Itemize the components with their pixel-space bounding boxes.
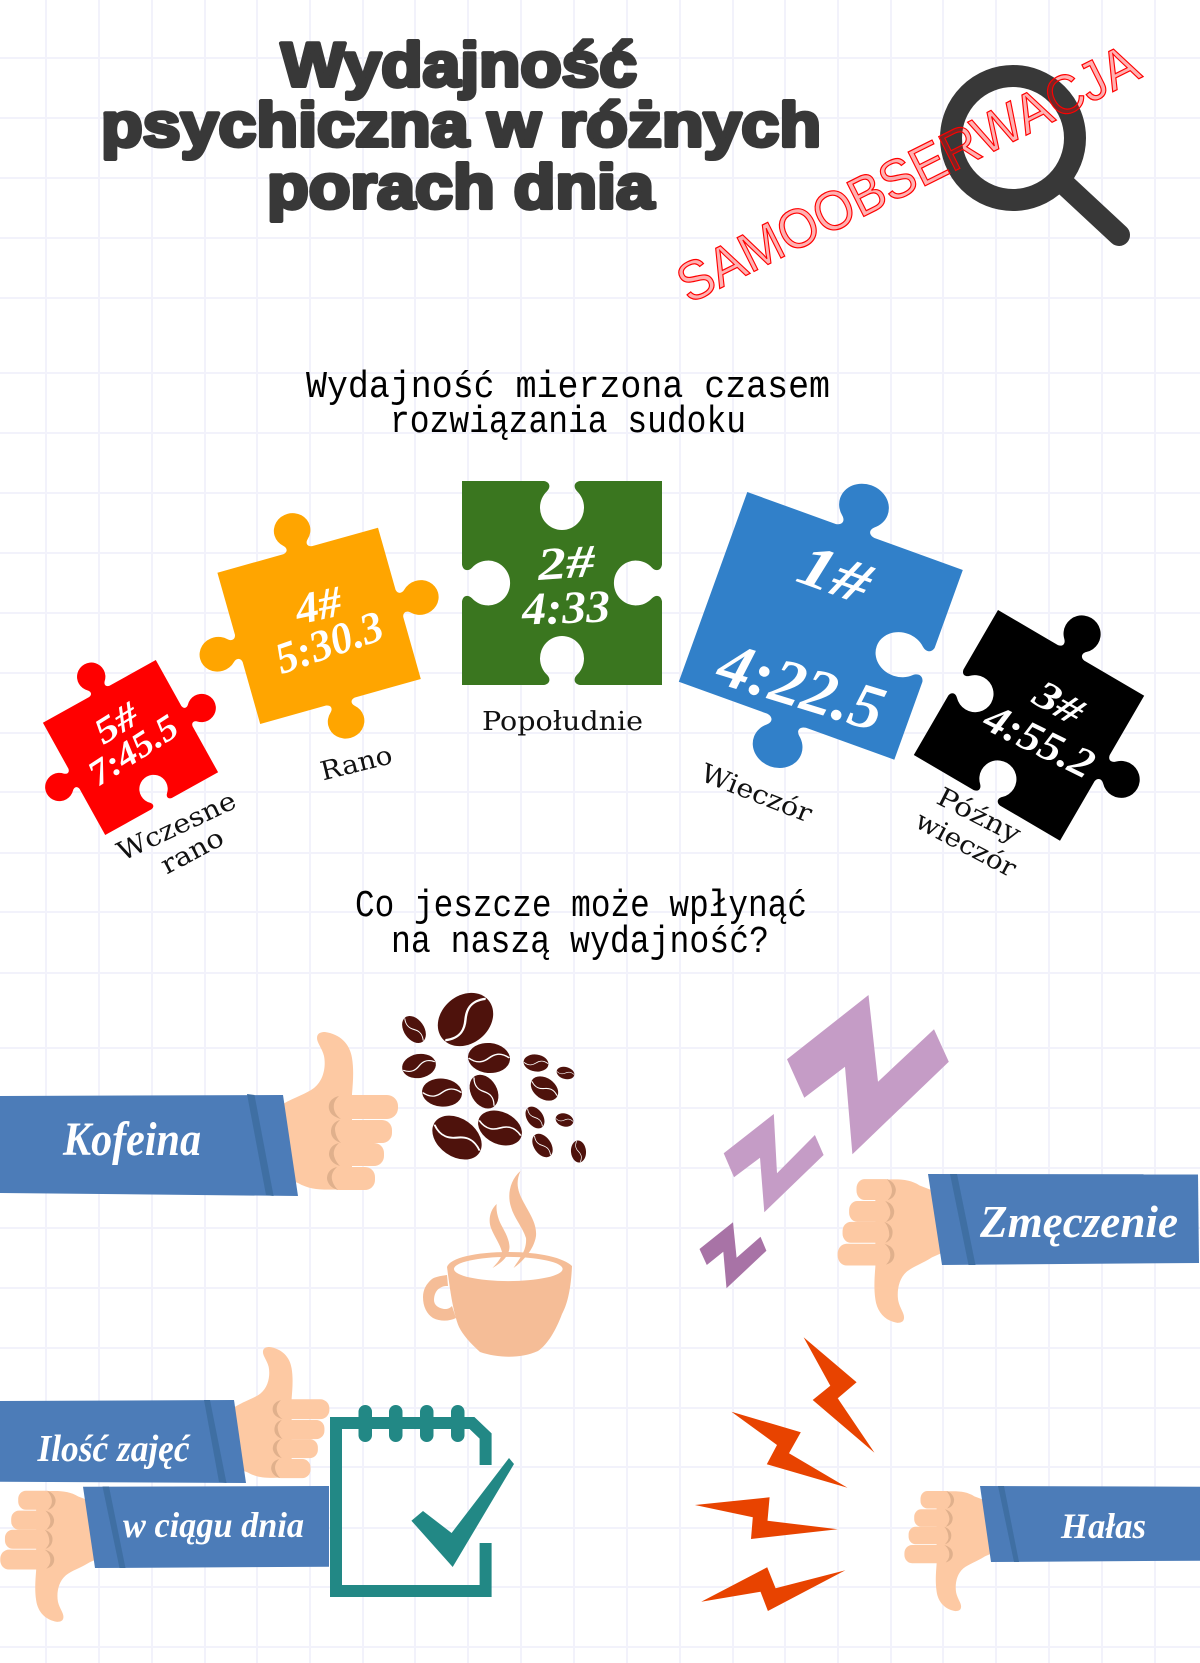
icon: coffee cup [423, 1171, 572, 1357]
puzzle: late evening (black): 4:55.2 [976, 695, 1102, 788]
puzzle: afternoon (green): 2# [535, 535, 597, 590]
label: Wczesne rano: rano [156, 823, 229, 881]
label: Późny wieczór [910, 782, 1026, 884]
heading: other factors [355, 885, 807, 964]
label: Popołudnie: Popołudnie [482, 707, 643, 737]
label: Rano: Rano [317, 741, 396, 787]
sleeve: Hałas with thumb down: Hałas [1060, 1506, 1146, 1546]
sleeve: w ciągu dnia with thumb down: w ciągu dnia [123, 1505, 304, 1545]
icon: coffee beans [397, 982, 587, 1169]
icon: calendar with checkmark [336, 1405, 514, 1591]
puzzle: evening (blue): 1# [790, 531, 882, 618]
sleeve: Kofeina with thumb up: Kofeina [62, 1113, 201, 1166]
puzzle: early morning (red): 5# [86, 693, 147, 752]
sleeve: Ilość zajęć with thumb up: Ilość zajęć [37, 1428, 191, 1470]
heading: sudoku measure: Wydajność mierzona czasem [306, 366, 830, 409]
puzzle: evening (blue): 4:22.5 [709, 627, 893, 745]
stamp: SAMOOBSERWACJA: SAMOOBSERWACJA [667, 32, 1149, 315]
label: Wieczór: Wieczór [696, 758, 817, 829]
icon: zzz sleep [700, 995, 949, 1288]
title: psychiczna w różnych [101, 91, 821, 160]
puzzle: late evening (black) [914, 575, 1200, 861]
label: Późny wieczór: Późny [932, 782, 1026, 850]
heading: other factors: Co jeszcze może wpłynąć [355, 885, 807, 928]
sleeve: Zmęczenie with thumb down [838, 1174, 1199, 1323]
sleeve: Zmęczenie with thumb down: Zmęczenie [979, 1196, 1178, 1247]
label: Wczesne rano: Wczesne [113, 786, 241, 868]
label: Późny wieczór: wieczór [910, 806, 1022, 884]
sleeve: Ilość zajęć with thumb up [0, 1347, 329, 1483]
sleeve: Kofeina with thumb up [0, 1032, 398, 1196]
heading: sudoku measure: rozwiązania sudoku [390, 401, 746, 444]
puzzle: morning (orange): 4# [289, 577, 347, 634]
title: porach dnia [267, 153, 655, 222]
icon: magnifying glass [951, 76, 1119, 235]
icon: noise lightning bolts [695, 1337, 874, 1611]
puzzle: morning (orange) [168, 480, 470, 771]
puzzle: afternoon (green): 4:33 [520, 580, 611, 635]
puzzle: afternoon (green) [462, 481, 662, 685]
title [101, 31, 821, 222]
heading: sudoku measure [306, 366, 830, 444]
puzzle: morning (orange): 5:30.3 [269, 601, 390, 684]
puzzle: late evening (black): 3# [1025, 670, 1093, 735]
title: Wydajność [281, 31, 637, 100]
sleeve: Hałas with thumb down [904, 1486, 1200, 1611]
sleeve: w ciągu dnia with thumb down [0, 1486, 329, 1622]
heading: other factors: na naszą wydajność? [391, 921, 769, 964]
puzzle: early morning (red): 7:45.5 [81, 706, 185, 794]
puzzle: evening (blue) [662, 446, 979, 805]
puzzle: early morning (red) [1, 618, 245, 850]
